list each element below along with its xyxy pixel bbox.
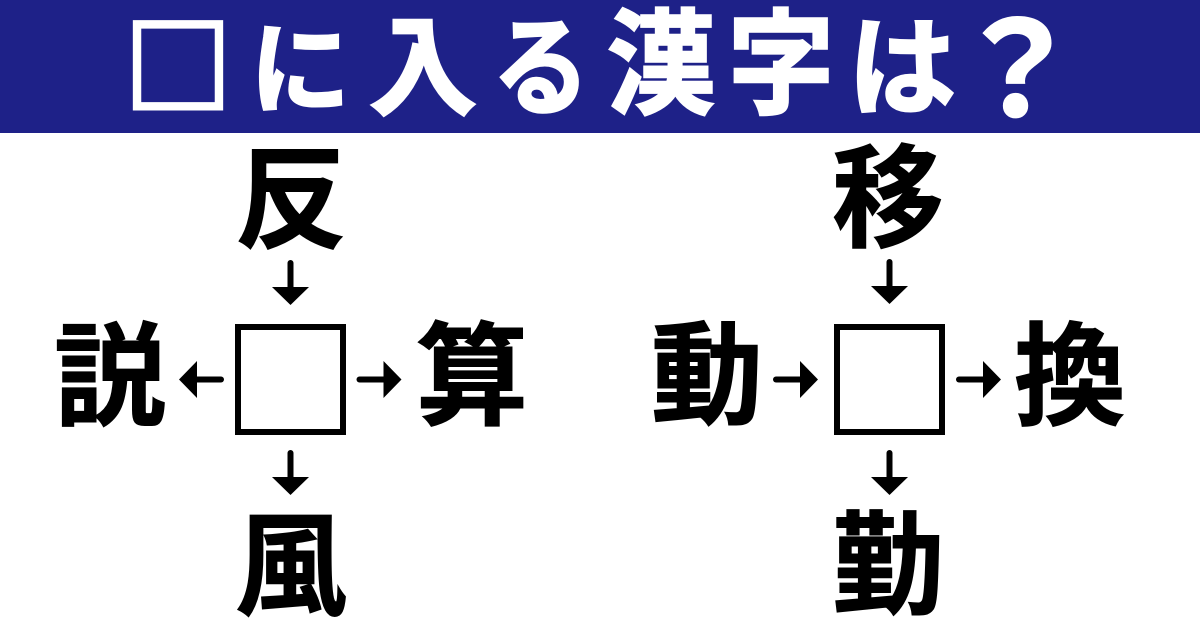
center box [235, 324, 346, 435]
kanji right: 換 [1014, 315, 1126, 440]
kanji top: 移 [832, 137, 944, 262]
title text: る [492, 8, 590, 129]
arrow: right puzzle right [959, 361, 1001, 398]
title text: に [250, 15, 350, 127]
kanji bottom: 勤 [832, 504, 944, 629]
arrow: left puzzle right [360, 361, 402, 398]
title banner [0, 0, 1200, 133]
title text: 漢 [607, 3, 715, 130]
center box [834, 324, 945, 435]
kanji bottom: 風 [235, 505, 347, 630]
kanji left: 説 [54, 315, 166, 440]
title text: は [848, 8, 956, 129]
arrow: right puzzle left [776, 361, 818, 398]
arrow: left puzzle left [179, 361, 221, 398]
title text [132, 0, 1082, 144]
arrow: left puzzle top [272, 263, 309, 305]
arrow: right puzzle bottom [871, 453, 908, 495]
title text: ？ [952, 0, 1082, 144]
right puzzle [651, 137, 1126, 629]
title text: 入 [369, 8, 477, 129]
title text: 字 [728, 3, 834, 130]
kanji left: 動 [651, 314, 763, 439]
arrow: right puzzle top [871, 262, 908, 304]
kanji right: 算 [416, 315, 528, 440]
kanji top: 反 [235, 138, 347, 263]
arrow: left puzzle bottom [272, 453, 309, 495]
left puzzle [54, 138, 528, 630]
